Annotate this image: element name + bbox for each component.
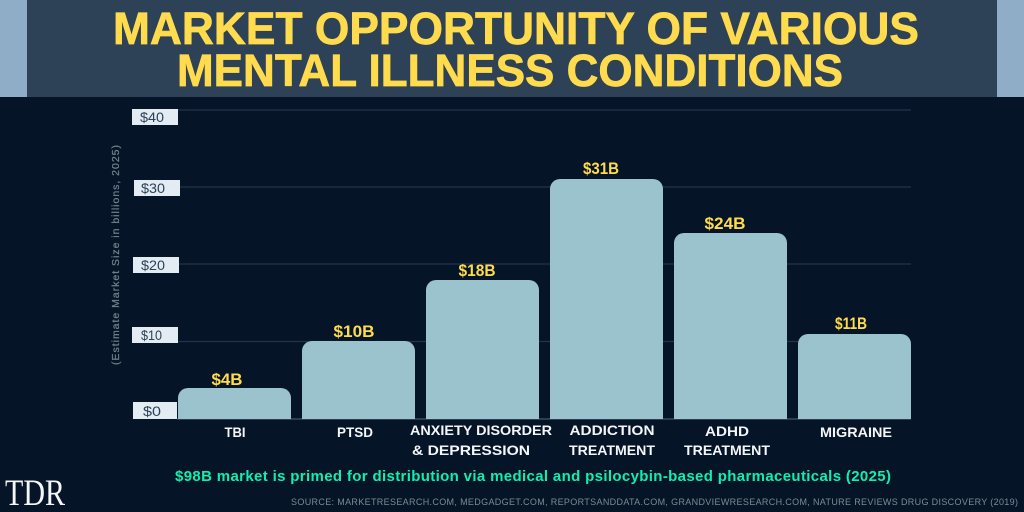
bars — [178, 179, 911, 419]
title: MENTAL ILLNESS CONDITIONS — [177, 45, 843, 96]
bar value labels: $31B — [583, 159, 619, 178]
bar value labels: $10B — [334, 322, 374, 341]
title: MARKET OPPORTUNITY OF VARIOUS — [113, 3, 919, 54]
bar value labels: $18B — [458, 261, 496, 280]
category labels: TREATMENT — [569, 442, 655, 458]
category labels: ANXIETY DISORDER — [410, 422, 552, 438]
bar: Anxiety disorder and depression — [426, 280, 539, 419]
bar: Addiction treatment — [550, 179, 663, 419]
category labels: & DEPRESSION — [412, 442, 530, 458]
title — [113, 3, 919, 96]
category labels — [224, 422, 892, 458]
bar value labels: $11B — [835, 314, 867, 333]
grid lines — [177, 110, 911, 419]
category labels: ADDICTION — [570, 422, 654, 438]
bar: PTSD — [302, 341, 415, 419]
bar: TBI — [178, 388, 291, 419]
y-axis labels: $20 — [141, 257, 165, 273]
y-axis labels: $0 — [143, 403, 161, 419]
bar value labels — [212, 159, 867, 389]
bar value labels: $24B — [704, 214, 746, 233]
category labels: MIGRAINE — [820, 424, 892, 440]
y-axis title: (Estimate Market Size in billions, 2025) — [110, 145, 122, 365]
category labels: TBI — [224, 424, 246, 440]
y-axis labels: $10 — [141, 327, 162, 343]
category labels: TREATMENT — [684, 442, 770, 458]
header banner — [0, 0, 1024, 97]
bar value labels: $4B — [212, 370, 242, 389]
market summary callout: $98B market is primed for distribution via medical and psilocybin-based pharmaceuticals (2025) — [175, 468, 891, 485]
y-axis labels: $40 — [140, 109, 164, 125]
bar: Migraine — [798, 334, 911, 419]
y-axis labels: $30 — [141, 180, 165, 196]
y-axis labels — [132, 109, 180, 419]
category labels: PTSD — [337, 424, 373, 440]
source line: SOURCE: MARKETRESEARCH.COM, MEDGADGET.COM, REPORTSANDDATA.COM, GRANDVIEWRESEARCH.COM, NATURE REVIEWS DRUG DISCOVERY (2019) — [291, 497, 1018, 507]
bar: ADHD treatment — [674, 233, 787, 419]
category labels: ADHD — [705, 423, 749, 439]
